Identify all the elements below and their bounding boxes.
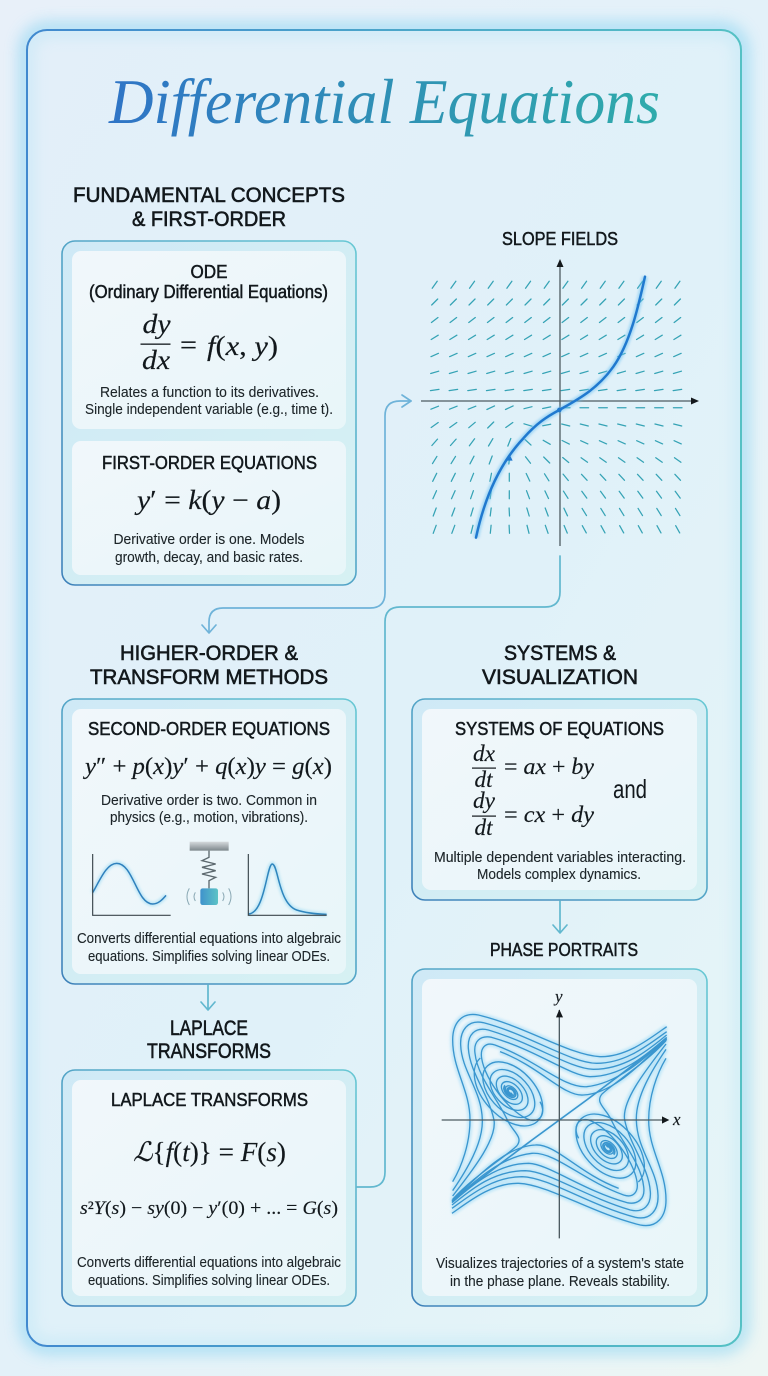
description: Multiple dependent variables interacting. (434, 849, 686, 866)
heading: fundamental concepts: & FIRST-ORDER (132, 208, 286, 231)
heading: slope fields: SLOPE FIELDS (502, 229, 618, 249)
description: converts (77, 930, 341, 965)
description: Models complex dynamics. (477, 866, 641, 883)
equation: dy/dt: dt (474, 815, 493, 840)
chart: resonance peak (248, 854, 327, 915)
heading: laplace transforms: LAPLACE (170, 1017, 248, 1040)
arrow: slope fields to laplace panel (357, 556, 560, 1187)
heading: fundamental concepts (73, 184, 345, 231)
description (436, 1255, 684, 1290)
card: first-order equations (72, 441, 346, 575)
card title: SYSTEMS OF EQUATIONS (455, 719, 664, 739)
heading: systems: SYSTEMS & (504, 642, 616, 665)
panel: systems of equations (412, 699, 707, 900)
equation: dy/dt: dy (473, 788, 496, 813)
equation: dy/dx = f(x,y) (140, 309, 278, 375)
description (101, 792, 317, 826)
solution curve (476, 277, 645, 538)
panel: phase portraits (412, 969, 707, 1306)
arrow: first-order to slope fields (202, 395, 411, 633)
heading: fundamental concepts: FUNDAMENTAL CONCEPTS (73, 184, 345, 207)
axis label x: x (672, 1110, 681, 1129)
description: Derivative order is two. Common in (101, 792, 317, 809)
description: equations. Simplifies solving linear ODEs. (88, 1272, 330, 1289)
equation: dy/dt (472, 788, 595, 840)
equation: dx/dt: = ax + by (504, 754, 595, 779)
equation: dy/dx = f(x,y): f(x, y) (207, 331, 278, 361)
chart: slope field (421, 259, 699, 546)
equation: y′ = k(y − a) (134, 485, 281, 515)
title: Differential Equations (108, 67, 660, 137)
description: physics (e.g., motion, vibrations). (110, 809, 308, 826)
equation: dx/dt: dt (474, 767, 493, 792)
description: Single independent variable (e.g., time t). (85, 401, 333, 418)
equation: dy/dx = f(x,y): = (180, 330, 197, 360)
chart: phase portrait (442, 987, 681, 1238)
label: and: and (613, 774, 647, 804)
heading: laplace transforms: TRANSFORMS (147, 1040, 271, 1063)
icon: spring and mass (187, 842, 231, 905)
description: Derivative order is one. Models (114, 531, 304, 548)
panel: second-order equations (62, 699, 356, 984)
description: growth, decay, and basic rates. (115, 549, 303, 566)
description (114, 531, 304, 566)
heading: systems: VISUALIZATION (482, 666, 638, 689)
slope field ticks (430, 281, 682, 533)
description (77, 1254, 341, 1289)
equation: dy/dx = f(x,y): dx (142, 345, 170, 375)
description: Visualizes trajectories of a system's state (436, 1255, 684, 1272)
axis label y: y (553, 987, 563, 1006)
arrow: second-order to laplace (201, 985, 215, 1010)
description: Relates a function to its derivatives. (100, 384, 319, 401)
equation: laplace definition: ℒ{f(t)} = F(s) (133, 1137, 286, 1167)
description (85, 384, 333, 418)
equation: y″ + p(x)y′ + q(x)y = g(x) (83, 754, 332, 780)
heading: higher-order: TRANSFORM METHODS (90, 666, 328, 689)
equation: transformed ODE: s²Y(s) − sy(0) − y′(0) + ... = G(s) (80, 1198, 338, 1219)
card title: SECOND-ORDER EQUATIONS (88, 719, 330, 739)
panel: laplace transforms (62, 1070, 356, 1306)
chart: damped wave (93, 854, 171, 915)
card: ODE (72, 251, 346, 429)
description: converts: equations. Simplifies solving linear ODEs. (88, 948, 330, 965)
card title: ODE: (Ordinary Differential Equations) (89, 282, 328, 302)
equation: dx/dt (472, 741, 595, 792)
equation: dy/dx = f(x,y): dy (142, 309, 171, 339)
card title: LAPLACE TRANSFORMS (111, 1090, 308, 1110)
equation: dx/dt: dx (473, 741, 496, 766)
description (434, 849, 686, 883)
heading: systems (482, 642, 638, 689)
trajectories (442, 1009, 669, 1238)
description: converts: Converts differential equations into algebraic (77, 930, 341, 947)
equation: dy/dt: = cx + dy (504, 802, 595, 827)
description: in the phase plane. Reveals stability. (450, 1273, 670, 1290)
panel: fundamental concepts (62, 241, 356, 585)
illustration: oscillation graphs and spring (93, 842, 327, 915)
card title: FIRST-ORDER EQUATIONS (102, 453, 317, 473)
heading: higher-order: HIGHER-ORDER & (120, 642, 298, 665)
heading: laplace transforms (147, 1017, 271, 1063)
card title: ODE (89, 262, 328, 302)
description: Converts differential equations into algebraic (77, 1254, 341, 1271)
heading: phase portraits: PHASE PORTRAITS (490, 940, 638, 960)
heading: higher-order (90, 642, 328, 689)
axes (421, 259, 699, 546)
arrow: systems to phase portraits (553, 901, 567, 933)
card title: ODE: ODE (190, 262, 228, 282)
